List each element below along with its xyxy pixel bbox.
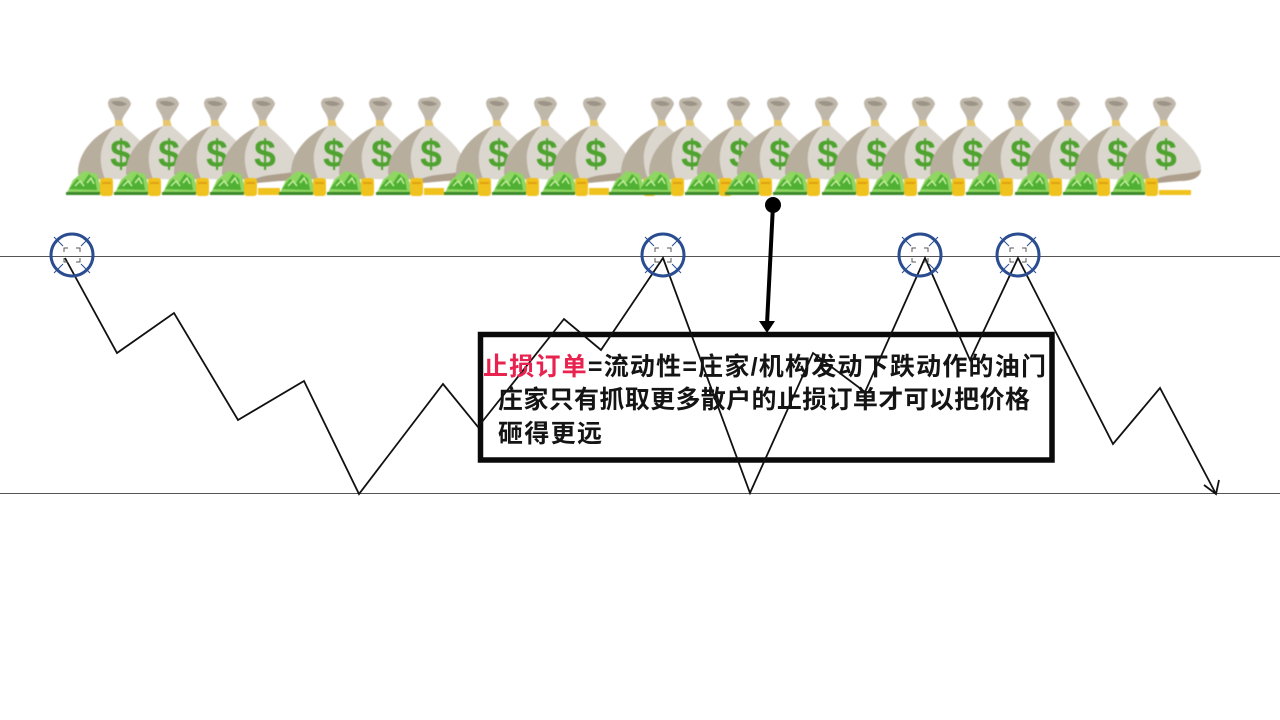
pointer arrow from money bags to callout	[759, 197, 781, 333]
money bag 9: $	[536, 133, 558, 176]
zigzag price line	[65, 258, 1216, 494]
money bag 1: $	[110, 133, 132, 176]
money bag 14	[725, 97, 815, 196]
money bag 4	[210, 97, 300, 196]
stop-loss target 3	[899, 234, 941, 276]
money bag 12	[637, 97, 727, 196]
callout text	[483, 353, 1046, 448]
money bag 19	[966, 97, 1056, 196]
money bag 3	[162, 97, 252, 196]
money bag 20	[1015, 97, 1105, 196]
row of money bags	[66, 97, 1201, 196]
stop-loss target 1	[51, 234, 93, 276]
money bag 1	[66, 97, 156, 196]
money bag 3: $	[206, 133, 228, 176]
money bag 21	[1063, 97, 1153, 196]
price line arrowhead	[1204, 480, 1219, 494]
money bag 5: $	[323, 133, 345, 176]
stop-loss target 2	[642, 234, 684, 276]
money bag 18	[918, 97, 1008, 196]
money bag 2: $	[158, 133, 180, 176]
money bag 14: $	[769, 133, 791, 176]
money bag 16: $	[866, 133, 888, 176]
money bag 19: $	[1010, 133, 1032, 176]
money bag 8: $	[488, 133, 510, 176]
money bag 13	[685, 97, 775, 196]
money bag 17: $	[914, 133, 936, 176]
money bag 7	[376, 97, 466, 196]
money bag 10: $	[585, 133, 607, 176]
money bag 5	[279, 97, 369, 196]
money bag 12: $	[681, 133, 703, 176]
money bag 7: $	[420, 133, 442, 176]
money bag 17	[870, 97, 960, 196]
money bag 9	[492, 97, 582, 196]
money bag 18: $	[962, 133, 984, 176]
money bag 13: $	[729, 133, 751, 176]
callout line 2: 庄家只有抓取更多散户的止损订单才可以把价格	[498, 386, 1030, 414]
callout box frame	[480, 334, 1052, 460]
money bag 15: $	[817, 133, 839, 176]
money bag 6: $	[371, 133, 393, 176]
money bag 21: $	[1107, 133, 1129, 176]
money bag 10	[541, 97, 631, 196]
price level line: lower	[0, 492, 1280, 494]
callout line 3: 砸得更远	[498, 420, 602, 448]
money bag 16	[822, 97, 912, 196]
money bag 6	[327, 97, 417, 196]
callout line 1: 止损订单=流动性=庄家/机构发动下跌动作的油门	[483, 353, 1046, 381]
money bag 20: $	[1059, 133, 1081, 176]
money bag 4: $	[254, 133, 276, 176]
money bag 8	[444, 97, 534, 196]
price level line: upper	[0, 256, 1280, 258]
money bag 22	[1111, 97, 1201, 196]
money bag 22: $	[1155, 133, 1177, 176]
stop-loss target 4	[997, 234, 1039, 276]
money bag 11	[609, 97, 699, 196]
money bag 15	[773, 97, 863, 196]
money bag 2	[114, 97, 204, 196]
